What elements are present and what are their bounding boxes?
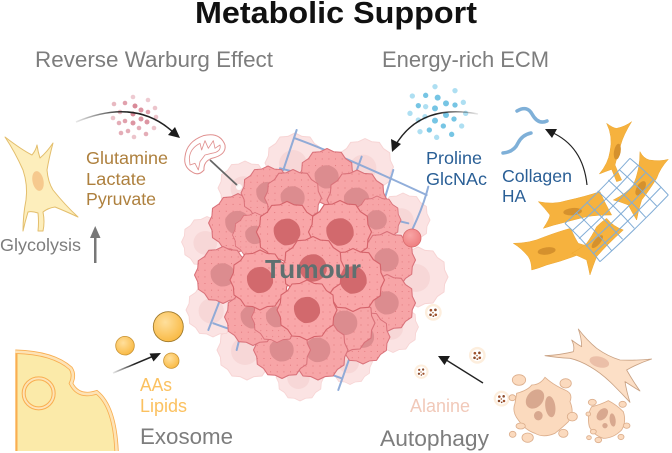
arrow: metabolites to mitochondrion xyxy=(76,112,180,138)
text: Alanine: Alanine xyxy=(410,396,470,416)
icon: mitochondrion xyxy=(185,135,225,174)
panel: autophagy xyxy=(410,304,652,443)
icon: metabolite dots pink xyxy=(111,95,158,139)
front tumour cells xyxy=(230,200,384,340)
heading: Autophagy: Autophagy xyxy=(380,426,489,451)
text: Glycolysis: Glycolysis xyxy=(0,235,81,255)
text: Collagen HA: HA xyxy=(502,186,526,206)
text: Collagen HA: Collagen xyxy=(502,166,572,186)
icon: yellow fibroblast xyxy=(5,137,78,231)
arrow: autophagy to tumour xyxy=(438,356,483,383)
connector: cell to mitochondrion xyxy=(210,160,242,190)
arrow: to collagen xyxy=(545,129,587,185)
arrow: exosome to tumour xyxy=(113,353,161,373)
label: Tumour: Tumour xyxy=(265,254,361,284)
panel: reverse Warburg effect xyxy=(0,95,180,263)
arrow: ECM metabolites to tumour xyxy=(391,112,478,152)
heading: Exosome: Exosome xyxy=(140,424,233,449)
text: Glutamine Lactate Pyruvate: Glutamine xyxy=(86,148,168,168)
extracellular matrix fibres xyxy=(208,130,428,390)
text: Glutamine Lactate Pyruvate xyxy=(86,148,168,209)
icon: vesicles xyxy=(414,304,510,407)
icon: peach fibroblast xyxy=(545,329,652,402)
icon: collagen strands xyxy=(503,109,547,153)
panel: exosome xyxy=(15,312,187,453)
text: Collagen HA xyxy=(502,166,572,206)
mid tumour cells xyxy=(194,148,416,380)
text: AAs Lipids xyxy=(140,375,187,416)
text: AAs Lipids: Lipids xyxy=(140,396,187,416)
text: Proline GlcNAc: GlcNAc xyxy=(426,169,487,189)
icon: metabolite dots blue xyxy=(407,84,468,140)
icon: red vesicle xyxy=(403,229,421,247)
text: Proline GlcNAc: Proline xyxy=(426,148,482,168)
text: Proline GlcNAc xyxy=(426,148,487,189)
arrow: glycolysis up xyxy=(90,226,100,263)
icon: secreting cell xyxy=(15,352,117,453)
text: AAs Lipids: AAs xyxy=(140,375,172,395)
icon: large exosomes xyxy=(116,312,183,368)
text: Glutamine Lactate Pyruvate: Pyruvate xyxy=(86,189,156,209)
icon: autophagic cells xyxy=(509,375,630,443)
panel: tumour xyxy=(182,130,448,401)
panel: energy-rich ECM xyxy=(391,84,668,275)
heading: Reverse Warburg Effect: Reverse Warburg Effect xyxy=(35,47,273,72)
pale outer cells xyxy=(182,133,448,401)
icon: orange fibroblasts with matrix xyxy=(513,122,668,275)
heading: Energy-rich ECM: Energy-rich ECM xyxy=(382,47,549,72)
text: Glutamine Lactate Pyruvate: Lactate xyxy=(86,169,146,189)
